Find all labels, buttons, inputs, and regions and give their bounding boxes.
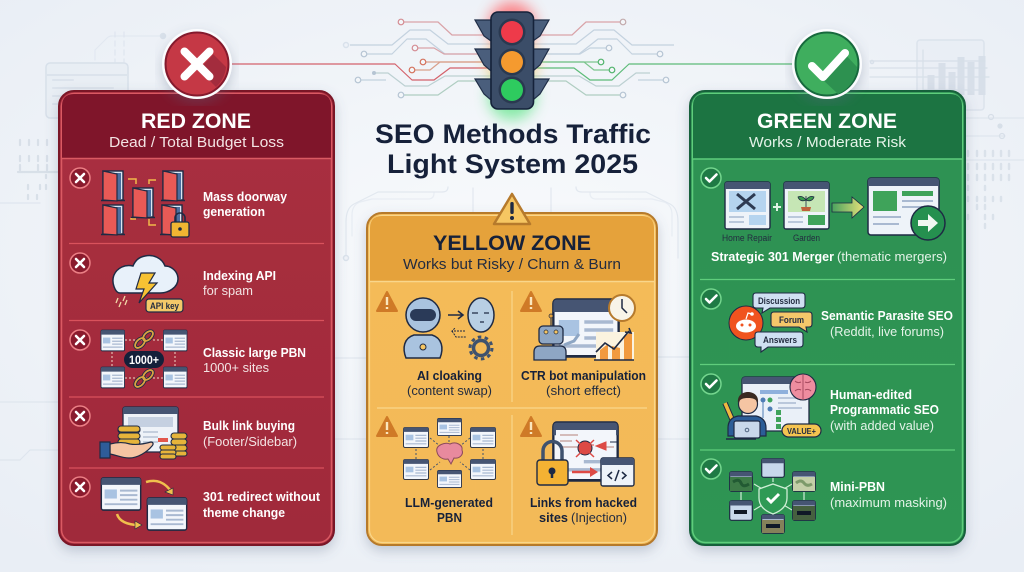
title: Light System 2025 [387, 149, 638, 179]
red zone header: RED ZONE [141, 110, 251, 133]
item: llm-generated pbn [377, 417, 495, 525]
red zone header [62, 94, 331, 158]
item: classic large pbn: 1000+ [129, 355, 159, 367]
green zone header: Works / Moderate Risk [749, 134, 907, 151]
item: 301 redirect: theme change [203, 505, 285, 520]
item: human-edited programmatic seo [701, 374, 939, 439]
panel: green zone [690, 91, 965, 545]
item: ctr bot manipulation: CTR bot manipulation [521, 368, 646, 383]
item: 301 redirect [70, 477, 321, 530]
item: llm-generated pbn: LLM-generated [405, 495, 493, 510]
item: human-edited programmatic seo: (with added value) [830, 418, 934, 433]
green zone header: GREEN ZONE [757, 110, 897, 133]
item: indexing api: for spam [203, 283, 253, 298]
icon: red x badge [162, 29, 232, 99]
item: human-edited programmatic seo: Programmatic SEO [830, 402, 939, 417]
item: classic large pbn [70, 329, 306, 389]
item: ai cloaking [377, 292, 494, 398]
item: 301 redirect: 301 redirect without [203, 489, 321, 504]
yellow zone header: Works but Risky / Churn & Burn [403, 256, 621, 273]
item: classic large pbn: Classic large PBN [203, 345, 306, 360]
item: semantic parasite seo: Discussion [758, 296, 800, 306]
item: strategic 301 merger: Garden [793, 233, 820, 243]
icon: green check badge [792, 29, 862, 99]
item: semantic parasite seo: (Reddit, live forums) [830, 324, 944, 339]
panel: yellow zone [367, 194, 657, 545]
item: ctr bot manipulation: (short effect) [546, 383, 621, 398]
title: SEO Methods Traffic [375, 119, 651, 149]
item: strategic 301 merger: (thematic mergers) [837, 249, 947, 264]
item: bulk link buying [70, 406, 297, 459]
item: semantic parasite seo: Forum [779, 315, 804, 325]
item: links from hacked sites [521, 417, 637, 525]
item: mini-pbn: (maximum masking) [830, 495, 947, 510]
yellow zone header: YELLOW ZONE [433, 232, 591, 255]
item: bulk link buying: (Footer/Sidebar) [203, 434, 297, 449]
icon: traffic light [475, 2, 549, 120]
item: links from hacked sites: Links from hacked [530, 495, 637, 510]
item: ai cloaking: AI cloaking [417, 368, 482, 383]
item: strategic 301 merger: Strategic 301 Merger [711, 249, 834, 264]
item: ai cloaking: (content swap) [407, 383, 492, 398]
item: indexing api [70, 253, 276, 312]
icon: warning triangle [494, 194, 530, 224]
item: mini-pbn: Mini-PBN [830, 479, 885, 494]
item: indexing api: Indexing API [203, 268, 276, 283]
circuit lines around traffic light [232, 19, 792, 98]
red zone header: Dead / Total Budget Loss [109, 134, 284, 151]
item: semantic parasite seo: Semantic Parasite SEO [821, 308, 953, 323]
item: classic large pbn: 1000+ sites [203, 360, 269, 375]
item: mass doorway generation: generation [203, 204, 265, 219]
item: llm-generated pbn: PBN [437, 510, 462, 525]
item: mass doorway generation: Mass doorway [203, 189, 288, 204]
item: mini-pbn [701, 459, 947, 533]
yellow zone header [370, 216, 654, 282]
item: human-edited programmatic seo: VALUE+ [787, 426, 816, 436]
item: links from hacked sites: sites [539, 510, 568, 525]
background decoration: circuit lines and faded charts [0, 32, 1024, 460]
panel: red zone [59, 91, 334, 545]
item: links from hacked sites: (Injection) [571, 510, 627, 525]
green zone header [693, 94, 962, 159]
item: semantic parasite seo: Answers [763, 335, 797, 345]
item: strategic 301 merger: Home Repair [722, 233, 772, 243]
item: mass doorway generation [70, 168, 288, 237]
item: indexing api: API key [150, 301, 179, 311]
title [375, 119, 651, 179]
item: bulk link buying: Bulk link buying [203, 418, 295, 433]
item: human-edited programmatic seo: Human-edited [830, 387, 912, 402]
item: strategic 301 merger [701, 168, 947, 264]
item: ctr bot manipulation [521, 292, 646, 398]
item: semantic parasite seo [701, 289, 953, 352]
